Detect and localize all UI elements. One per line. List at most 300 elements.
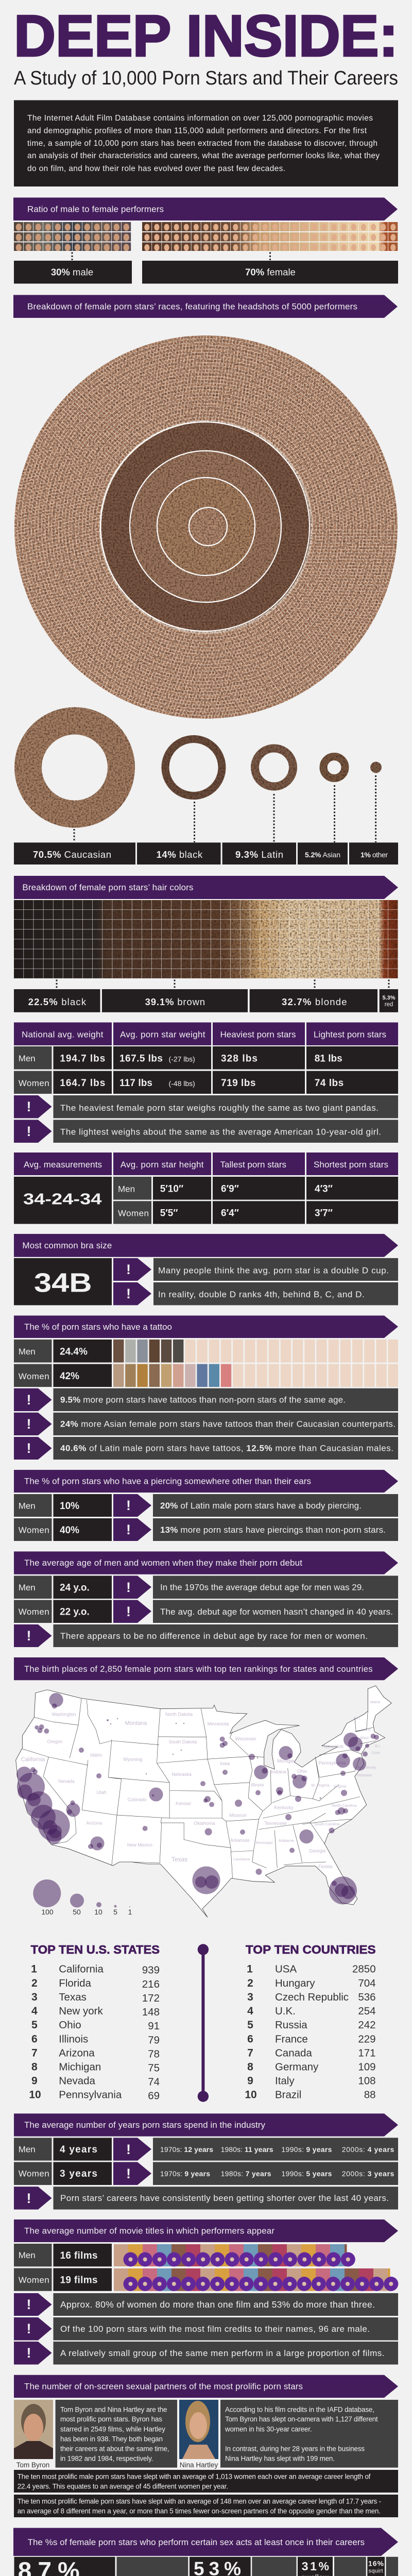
map: US birth places: Virginia [334,1784,347,1789]
table: weight: 164.7 lbs [60,1078,105,1089]
map: US birth places: Montana [125,1720,147,1726]
photo placeholder: Nina Hartley [179,2400,218,2469]
callout: careers getting shorter: Porn stars’ careers have consistently been getting shorter over the last 40 years. [60,2193,389,2203]
row: male debut age: In the 1970s the average debut age for men was 29. [160,1583,364,1592]
map: US birth places: Tennessee [264,1821,287,1826]
callout: tattoos vs. non-performers [14,1388,398,1411]
ring: Asian [323,756,345,842]
stat: male share [14,261,132,283]
row: female debut age: 22 y.o. [60,1606,90,1618]
text: partner counts: In contrast, during her 28 years in the business [225,2445,365,2453]
row: female career length [14,2162,398,2185]
banner: movie titles [14,2219,398,2242]
table: weight: 117 lbs [119,1078,152,1089]
map: US birth places: Utah [96,1790,107,1795]
list: top ten countries: 4 [247,2005,253,2017]
chart: sex act treemap: 16% [368,2560,384,2568]
banner: ratio of male to female performers [13,198,398,221]
panel: introduction: time, a sample of 10,000 porn stars has been extracted from the database to discover, through [27,139,377,148]
callout: double D belief: Many people think the avg. porn star is a double D cup. [158,1266,389,1276]
map: US birth places: Mass [360,1737,369,1740]
list: top ten U.S. states: 6 [31,2033,38,2045]
banner: years in the industry: The average number of years porn stars spend in the industry [24,2120,266,2130]
chart: sex act treemap [14,2557,398,2576]
list: top ten U.S. states: 939 [142,1964,160,1976]
row: female debut age: ! [126,1604,131,1619]
map: US birth places: North Dakota [165,1711,193,1717]
row: female career length: 1980s: 7 years [221,2170,271,2178]
map: US birth places: Colorado [128,1797,146,1802]
row: male piercings: ! [126,1498,131,1513]
row: male tattoo rate and strips: Men [19,1347,36,1357]
callout: debut age by race: ! [27,1628,31,1643]
list: top ten U.S. states: 69 [148,2090,160,2102]
stats: hair color percentages: 39.1% brown [145,996,205,1007]
row: female debut age: Women [19,1607,49,1617]
stats: race percentages: 70.5% Caucasian [33,849,111,860]
legend: bubble sizes: 50 [73,1908,81,1916]
row: female debut age: The avg. debut age for women hasn’t changed in 40 years. [160,1607,393,1617]
row: female piercings: Women [19,1525,49,1535]
row: male film count with disc row: 16 films [60,2250,98,2261]
panel: introduction: and demographic profiles of more than 115,000 adult performers and directors. For the first [27,127,367,135]
map: US birth places: Oklahoma [194,1821,215,1826]
list: top ten U.S. states: 1 [31,1963,37,1975]
callout: Latin male tattoo rate [14,1437,398,1460]
list: top ten countries: Italy [275,2075,295,2087]
stat: male share: 30% male [51,267,93,278]
text: prolific performers: their careers at about the same time, [60,2445,169,2453]
table: weight: 74 lbs [315,1078,344,1089]
list: top ten U.S. states: 10 [29,2089,41,2101]
map: US birth places: Arkansas [230,1838,250,1843]
table: weight: National avg. weight [22,1029,104,1039]
list: top ten countries: 242 [358,2019,376,2031]
map: US birth places: Louisiana [233,1857,250,1861]
legend: bubble sizes: 5 [113,1908,117,1916]
banner: bra size: Most common bra size [22,1241,112,1250]
table: weight: 194.7 lbs [60,1053,105,1064]
callout: films by women: Approx. 80% of women do more than one film and 53% do more than three. [60,2299,375,2310]
list: top ten U.S. states: Nevada [59,2075,96,2087]
banner: tattoos: The % of porn stars who have a tattoo [24,1322,172,1332]
stats: race percentages: 14% black [157,849,203,860]
text: prolific performers: in 1982 and 1984, respectively. [60,2455,153,2463]
callout: heaviest performer: The heaviest female porn star weighs roughly the same as two giant pandas. [60,1103,379,1113]
table: measurements and height: 5′10″ [160,1184,183,1194]
stats: race percentages [14,842,398,865]
table: measurements and height: Tallest porn stars [220,1160,286,1170]
row: male piercings: 20% of Latin male porn stars have a body piercing. [160,1501,362,1511]
photo placeholder: Nina Hartley: Nina Hartley [180,2461,218,2469]
row: male career length: 1980s: 11 years [221,2145,273,2154]
list: top ten countries: France [275,2033,308,2045]
map: US birth places: New Mexico [127,1842,152,1848]
list: top ten countries: 88 [364,2089,376,2101]
stats: hair color percentages: 32.7% blonde [282,996,347,1007]
map: US birth places: South Carolina [314,1822,340,1826]
banner: debut age: The average age of men and women when they make their porn debut [24,1558,302,1568]
map: US birth places: Minnesota [208,1721,229,1726]
list: top ten U.S. states: Arizona [59,2047,95,2059]
map: US birth places: Arizona [86,1821,102,1826]
text: male partner average: 22.4 years. This equates to an average of 45 different women per year. [18,2482,228,2490]
stat: bra size 34B [14,1258,112,1305]
panel: introduction [14,100,398,187]
row: male career length: 1990s: 9 years [281,2145,332,2154]
row: female tattoo rate and strips [14,1364,398,1387]
list: top ten U.S. states: 78 [148,2048,160,2060]
list: top ten countries: 704 [358,1977,376,1989]
text: prolific performers: starred in 2549 films, while Hartley [60,2426,165,2433]
callout: lightest performer [14,1120,398,1143]
list: top ten countries: Germany [275,2061,319,2073]
callout: Latin male tattoo rate: 40.6% of Latin male porn stars have tattoos, 12.5% more than Caucasian males. [60,1444,393,1453]
callout: double D reality: ! [126,1286,131,1301]
list: top ten countries: 8 [247,2061,253,2073]
text: female partner average: an average of 8 different men a year, or more than 5 times fewer on-screen partners of the opposite gender than the men. [18,2507,381,2515]
table: weight: 81 lbs [315,1053,342,1064]
map: US birth places: Vt. [356,1717,360,1720]
map: US birth places: Indiana [271,1769,286,1774]
banner: debut age [14,1551,398,1574]
table: weight: 719 lbs [221,1078,255,1089]
table: weight [14,1022,398,1094]
row: male career length: ! [126,2142,131,2157]
row: male tattoo rate and strips [14,1340,398,1362]
map: US birth places: Delaware [357,1774,372,1777]
map: US birth places: Idaho [90,1753,102,1758]
map: US birth places: Maine [370,1701,380,1704]
list: top ten U.S. states: 7 [31,2047,38,2059]
callout: Latin male tattoo rate: ! [27,1440,31,1456]
map: US birth places: Oregon [47,1739,63,1744]
table: measurements and height [14,1153,398,1224]
table: measurements and height: 34-24-34 [23,1190,102,1208]
callout: debut age by race: There appears to be no difference in debut age by race for men or women. [60,1631,368,1641]
table: measurements and height: 5′5″ [160,1208,178,1219]
legend: bubble sizes: 10 [94,1908,102,1916]
list: top ten countries: 1 [247,1963,253,1975]
map: US birth places: Michigan [277,1758,296,1764]
callout: Asian tattoo rate: 24% more Asian female porn stars have tattoos than their Caucasian counterparts. [60,1419,396,1429]
stats: hair color percentages [14,989,398,1012]
text: prolific performers [56,2400,177,2468]
map: US birth places: Wisconsin [235,1736,256,1741]
chart: sex act treemap: squirt [369,2568,383,2574]
chart: headshot grids male and female [14,222,398,260]
text: partner counts: Nina Hartley has slept with 199 men. [225,2455,335,2463]
text: female partner average: The ten most prolific female porn stars have slept with an average of 148 men over an average career length of 17.7 years - [18,2498,381,2505]
row: male debut age: ! [126,1580,131,1595]
banner: hair colors [14,876,398,899]
table: measurements and height: 3′7″ [315,1208,333,1219]
list: top ten U.S. states: 8 [31,2061,38,2073]
legend: bubble sizes [33,1879,132,1916]
callout: films by women: ! [27,2297,31,2312]
list: top ten U.S. states: 75 [148,2062,160,2074]
list: top ten U.S. states: Florida [59,1977,92,1989]
text: partner counts: Tom Byron has slept on-camera with 1,127 different [225,2415,378,2423]
list: top ten U.S. states: Ohio [59,2019,81,2031]
text: prolific performers: most prolific porn stars. Byron has [60,2415,162,2423]
list: top ten countries: 536 [358,1991,376,2003]
text: male partner average: The ten most prolific male porn stars have slept with an average of 1,013 women each over an average career length of [18,2472,371,2480]
banner: years in the industry [14,2113,398,2137]
ring: black [165,739,222,842]
panel: introduction: do on film, and how their role has evolved over the past few decades. [27,164,285,173]
row: male piercings: Men [19,1501,36,1511]
table: weight: (-48 lbs) [169,1079,195,1088]
callout: most film credits: ! [27,2321,31,2336]
map: US birth places: N.H. [364,1728,371,1732]
map: US birth places: Missouri [229,1813,247,1818]
callout: most film credits: Of the 100 porn stars with the most film credits to their names, 96 are male. [60,2324,370,2334]
callout: debut age by race [14,1624,398,1647]
panel: introduction: The Internet Adult Film Database contains information on over 125,000 pornographic movies [27,114,373,123]
map: US birth places: Illinois [251,1783,264,1788]
map: US birth places: Texas [171,1856,187,1863]
stat: bra size 34B: 34B [34,1268,92,1298]
row: female career length: 2000s: 3 years [342,2170,394,2178]
row: male debut age: 24 y.o. [60,1583,90,1593]
table: measurements and height: Men [118,1184,135,1194]
list: top ten U.S. states: Illinois [59,2033,88,2045]
stat: female share: 70% female [245,267,296,278]
chart: hair color swatch grid [14,900,398,989]
row: female tattoo rate and strips: 42% [60,1371,79,1382]
text: partner counts [220,2400,398,2468]
banner: sex acts [13,2528,398,2556]
map: US birth places: Wyoming [123,1757,142,1762]
row: female career length: 1990s: 5 years [281,2170,332,2178]
callout: double D reality [113,1282,398,1305]
callout: most film credits [14,2317,398,2340]
stats: race percentages: 9.3% Latin [235,849,283,860]
list: top ten countries: 229 [358,2033,376,2045]
banner: ratio of male to female performers: Ratio of male to female performers [27,204,164,214]
list: top ten countries: U.K. [275,2005,296,2017]
list: top ten countries: 5 [247,2019,253,2031]
row: female career length: 1970s: 9 years [160,2170,210,2178]
row: male tattoo rate and strips: 24.4% [60,1347,88,1357]
table: weight: 167.5 lbs [119,1053,163,1064]
chart: sex act treemap: 31% [302,2560,329,2573]
row: male career length: 2000s: 4 years [342,2145,394,2154]
list: top ten countries: 254 [358,2005,376,2017]
list: top ten U.S. states: 2 [31,1977,38,1989]
map: US birth places: Conn [372,1752,380,1755]
text: female partner average [14,2495,398,2517]
list: top ten countries: 7 [247,2047,253,2059]
table: measurements and height: 6′4″ [221,1208,239,1219]
list: top ten U.S. states: 91 [148,2020,160,2032]
row: female piercings [14,1518,398,1541]
list: top ten U.S. states: 79 [148,2034,160,2046]
banner: piercings: The % of porn stars who have a piercing somewhere other than their ears [24,1477,311,1486]
list: top ten U.S. states: 3 [31,1991,38,2003]
banner: birth places: The birth places of 2,850 female porn stars with top ten rankings for states and countries [24,1665,373,1674]
map: US birth places: California [21,1757,45,1763]
list: top ten U.S. states [29,1943,160,2102]
stats: race percentages: 5.2% Asian [305,851,340,859]
list: top ten countries: USA [275,1963,297,1975]
list: top ten countries: 109 [358,2061,376,2073]
banner: on-screen partners: The number of on-screen sexual partners of the most prolific porn stars [24,2381,303,2392]
banner: race breakdown: Breakdown of female porn stars’ races, featuring the headshots of 5000 performers [27,302,357,311]
list: top ten U.S. states: 4 [31,2005,38,2017]
divider: top ten lists [198,1944,209,2102]
callout: Asian tattoo rate: ! [27,1416,31,1432]
list: top ten countries: 2850 [352,1963,376,1975]
banner: piercings [14,1470,398,1493]
list: top ten countries: Hungary [275,1977,315,1989]
table: weight: Women [19,1078,49,1088]
callout: small group of men: A relatively small group of the same men perform in a large proportion of films. [60,2348,384,2358]
callout: lightest performer: ! [27,1124,31,1139]
banner: sex acts: The %s of female porn stars who perform certain sex acts at least once in their careers [28,2537,365,2547]
list: top ten countries: 171 [358,2047,376,2059]
map: US birth places: W. Virginia [311,1783,330,1788]
banner: bra size [14,1234,398,1257]
callout: careers getting shorter [14,2187,398,2210]
list: top ten U.S. states: TOP TEN U.S. STATES [31,1943,160,1956]
callout: small group of men: ! [27,2345,31,2361]
banner: birth places [14,1657,398,1680]
map: US birth places: South Dakota [169,1739,197,1744]
table: weight: 328 lbs [221,1053,258,1064]
map: US birth places: Pennsylvania [318,1760,346,1766]
row: female career length: Women [19,2169,49,2178]
table: measurements and height: 4′3″ [315,1184,333,1194]
callout: small group of men [14,2342,398,2365]
map: US birth places: Alabama [279,1838,294,1843]
row: male career length: Men [19,2144,36,2155]
legend: bubble sizes: 100 [41,1908,54,1916]
map: US birth places: Washington [52,1711,76,1717]
row: male debut age: Men [19,1583,36,1592]
text: partner counts: According to his film credits in the IAFD database, [225,2405,374,2413]
banner: hair colors: Breakdown of female porn stars’ hair colors [22,883,193,892]
row: male career length: 1970s: 12 years [160,2145,213,2154]
photo placeholder: Tom Byron: Tom Byron [16,2461,49,2469]
list: top ten U.S. states: Texas [59,1991,87,2003]
callout: films by women [14,2293,398,2316]
list: top ten countries: 6 [247,2033,253,2045]
row: male piercings [14,1494,398,1517]
list: top ten countries: Brazil [275,2089,301,2101]
map: US birth places: Georgia [309,1849,325,1854]
list: top ten countries: 10 [245,2089,257,2101]
table: weight: Lightest porn stars [314,1029,386,1039]
list: top ten U.S. states: New york [59,2005,103,2017]
map: US birth places: New Jersey [357,1766,376,1770]
map: US birth places: Ohio [297,1769,307,1774]
row: female piercings: 40% [60,1525,79,1536]
list: top ten countries: 3 [247,1991,253,2003]
callout: careers getting shorter: ! [27,2191,31,2206]
list: top ten U.S. states: 9 [31,2075,38,2087]
ring: Latin [255,748,293,842]
map: US birth places: Florida [318,1864,332,1869]
list: top ten countries: Canada [275,2047,312,2059]
table: measurements and height: Women [118,1209,149,1218]
callout: Asian tattoo rate [14,1413,398,1435]
list: top ten U.S. states: 148 [142,2006,160,2018]
row: male piercings: 10% [60,1501,79,1512]
ring: other [370,761,382,842]
text: partner counts: women in his 30-year career. [225,2426,312,2433]
map: US birth places: Kansas [176,1801,192,1806]
list: top ten U.S. states: 5 [31,2019,38,2031]
row: female piercings: 13% more porn stars have piercings than non-porn stars. [160,1525,386,1535]
row: male film count with disc row: Men [19,2250,36,2260]
callout: tattoos vs. non-performers: ! [27,1392,31,1408]
callout: double D belief [113,1258,398,1281]
stat: female share [142,261,398,283]
list: top ten countries: Czech Republic [275,1991,349,2003]
table: measurements and height: 6′9″ [221,1184,239,1194]
list: top ten countries: 2 [247,1977,253,1989]
ring: Caucasian [28,721,122,842]
map: US birth places: Mississippi [254,1840,273,1845]
callout: double D belief: ! [126,1262,131,1277]
table: weight: Avg. porn star weight [120,1029,205,1039]
callout: tattoos vs. non-performers: 9.5% more porn stars have tattoos than non-porn stars of the same age. [60,1395,346,1404]
row: female career length: 3 years [60,2168,97,2179]
list: top ten U.S. states: Pennsylvania [59,2089,122,2101]
stats: hair color percentages: 5.3% [382,995,396,1001]
list: top ten countries [245,1943,376,2101]
table: measurements and height: Shortest porn stars [314,1160,388,1170]
row: male film count with disc row [14,2244,355,2267]
row: male career length [14,2138,398,2161]
table: measurements and height: Avg. measurements [24,1160,102,1170]
banner: movie titles: The average number of movie titles in which performers appear [24,2226,274,2236]
list: top ten U.S. states: Michigan [59,2061,101,2073]
title: DEEP INSIDE: [14,3,398,68]
list: top ten U.S. states: 216 [142,1978,160,1990]
stats: hair color percentages: red [385,1002,393,1008]
text: prolific performers: Tom Byron and Nina Hartley are the [60,2405,167,2413]
map: US birth places: North Carolina [332,1803,357,1808]
list: top ten countries: TOP TEN COUNTRIES [246,1943,376,1956]
row: male debut age [14,1575,398,1599]
photo placeholder: Tom Byron [14,2400,53,2469]
row: female debut age [14,1600,398,1623]
row: female film count with disc row: Women [19,2275,49,2285]
map: US birth places: R.I. [375,1744,381,1748]
callout: lightest performer: The lightest weighs about the same as the average American 10-year-old girl. [60,1127,381,1137]
banner: tattoos [14,1316,398,1338]
list: top ten countries: 9 [247,2075,253,2087]
callout: heaviest performer: ! [27,1099,31,1114]
panel: introduction: an analysis of their characteristics and careers, what the average performer looks like, what they [27,151,380,160]
list: top ten U.S. states: California [59,1963,104,1975]
list: top ten U.S. states: 74 [148,2076,160,2088]
table: measurements and height: Avg. porn star height [121,1160,204,1170]
text: male partner average [14,2470,398,2493]
row: female piercings: ! [126,1522,131,1537]
map: US birth places: Nebraska [171,1772,192,1777]
callout: double D reality: In reality, double D ranks 4th, behind B, C, and D. [158,1290,365,1299]
map: US birth places: Iowa [220,1761,230,1766]
map: US birth places [16,1686,391,1918]
text: prolific performers: has been in 938. They both began [60,2435,163,2443]
row: male career length: 4 years [60,2144,97,2155]
banner: on-screen partners [14,2375,398,2398]
list: top ten countries: 108 [358,2075,376,2087]
